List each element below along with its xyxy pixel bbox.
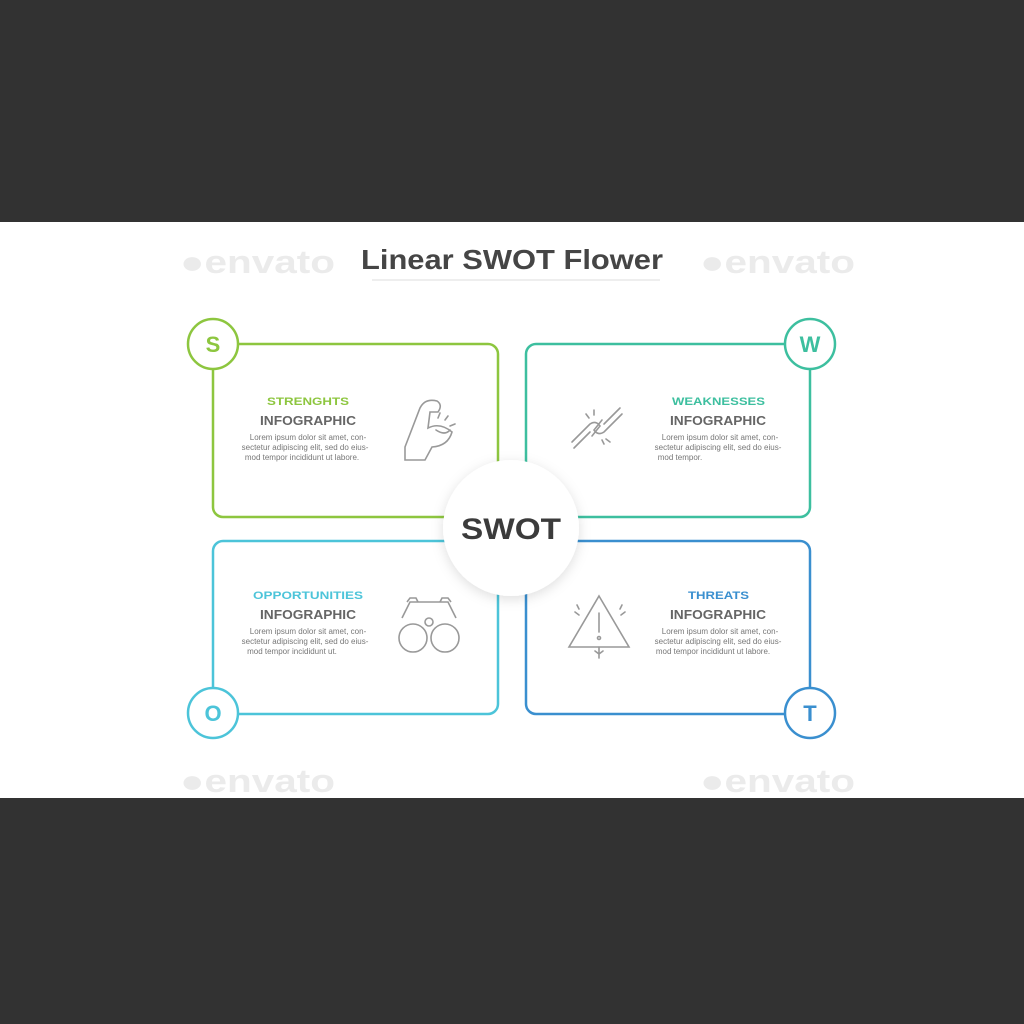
panel: weaknesses: sectetur adipiscing elit, sed do eius-: [655, 443, 782, 452]
panel: weaknesses: mod tempor.: [658, 453, 702, 462]
watermarks: ●envato: [700, 763, 855, 799]
panel: weaknesses: [526, 319, 835, 517]
center circle: [443, 460, 579, 596]
icon: warning: [569, 596, 629, 658]
watermarks: ●envato: [700, 244, 855, 280]
panel: threats: Lorem ipsum dolor sit amet, con-: [662, 627, 779, 636]
panel: opportunities: INFOGRAPHIC: [260, 607, 357, 622]
panel: strengths: INFOGRAPHIC: [260, 413, 357, 428]
white canvas: [0, 222, 1024, 798]
panel: opportunities: mod tempor incididunt ut.: [247, 647, 337, 656]
panel: threats: THREATS: [688, 590, 749, 602]
panel: threats: sectetur adipiscing elit, sed do eius-: [655, 637, 782, 646]
panel: weaknesses: WEAKNESSES: [672, 396, 765, 408]
panel: threats: mod tempor incididunt ut labore.: [656, 647, 770, 656]
title: Linear SWOT Flower: [361, 244, 663, 275]
panel: threats: INFOGRAPHIC: [670, 607, 767, 622]
icon: binoculars: [399, 598, 459, 652]
panel: strengths: Lorem ipsum dolor sit amet, con-: [250, 433, 367, 442]
panel: weaknesses: INFOGRAPHIC: [670, 413, 767, 428]
panel: opportunities: Lorem ipsum dolor sit amet, con-: [250, 627, 367, 636]
panel: strengths: mod tempor incididunt ut labore.: [245, 453, 359, 462]
panel: opportunities: [188, 541, 498, 738]
panel: strengths: S: [206, 332, 220, 357]
panel: opportunities: O: [204, 701, 222, 726]
panel: opportunities: sectetur adipiscing elit, sed do eius-: [242, 637, 369, 646]
panel: opportunities: OPPORTUNITIES: [253, 590, 363, 602]
panel: strengths: [188, 319, 498, 517]
center circle: SWOT: [461, 513, 561, 546]
panel: threats: [526, 541, 835, 738]
icon: broken chain: [572, 408, 622, 448]
watermarks: ●envato: [180, 763, 335, 799]
panel: threats: T: [803, 701, 817, 726]
watermarks: [180, 244, 855, 799]
panel: strengths: STRENGHTS: [267, 396, 349, 408]
panel: weaknesses: Lorem ipsum dolor sit amet, con-: [662, 433, 779, 442]
panel: weaknesses: W: [800, 332, 821, 357]
watermarks: ●envato: [180, 244, 335, 280]
panel: strengths: sectetur adipiscing elit, sed do eius-: [242, 443, 369, 452]
icon: arm: [405, 400, 455, 460]
